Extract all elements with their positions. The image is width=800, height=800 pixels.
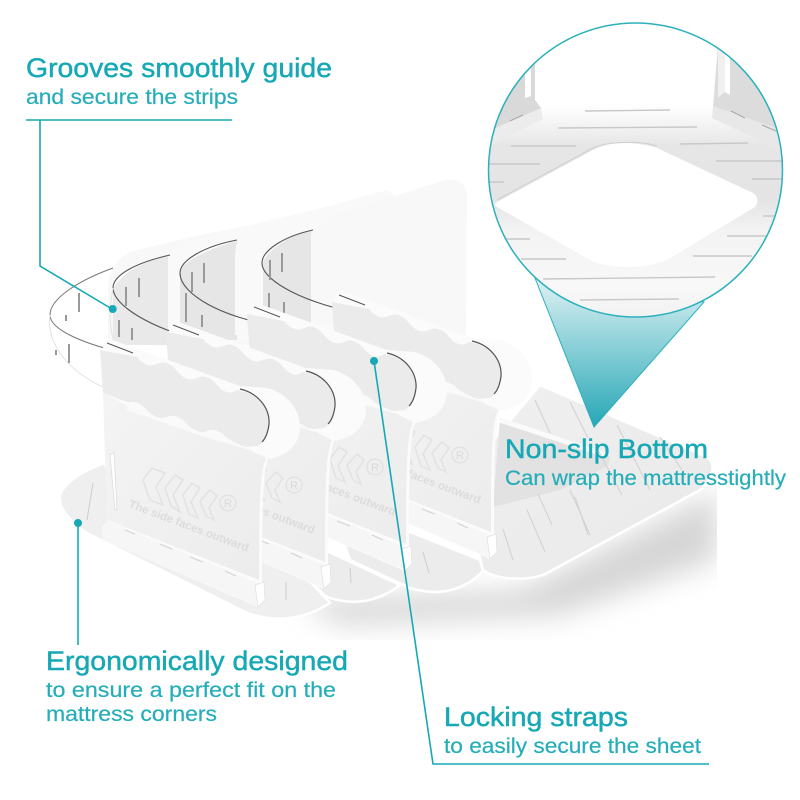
magnifier circle: non-slip bottom detail [480, 23, 790, 317]
back panel 2 [168, 212, 310, 340]
text: ergonomically designed: Ergonomically designed [46, 646, 348, 676]
drop shadow [300, 490, 717, 625]
product: mattress corner holder [50, 180, 717, 625]
text: grooves [26, 53, 332, 109]
holder 3 [247, 302, 447, 571]
leader: locking straps [371, 358, 709, 764]
back panel 3 [235, 190, 395, 335]
holder 4: R [456, 450, 464, 462]
text: grooves: Grooves smoothly guide [26, 53, 332, 83]
text: ergonomically designed: mattress corners [46, 703, 217, 726]
holder 2: The side faces outward [193, 481, 316, 537]
back panel 4 [311, 180, 467, 340]
text: ergonomically designed [46, 646, 348, 726]
text: ergonomically designed: to ensure a perfect fit on the [46, 679, 336, 702]
text: non-slip bottom: Can wrap the mattresstightly [505, 467, 787, 490]
holder 1: The side faces outward [127, 499, 250, 555]
base plate: front [60, 463, 330, 619]
holder 2: R [290, 480, 298, 492]
text: non-slip bottom [505, 434, 787, 490]
holder 2 [166, 320, 366, 589]
holder 3: R [371, 462, 379, 474]
holder 1 [100, 338, 300, 607]
plate ribs [87, 483, 429, 600]
leader: grooves [26, 120, 232, 312]
holder 1: R [224, 498, 232, 510]
transparent straps [50, 230, 360, 387]
text: locking straps: to easily secure the sheet [444, 735, 701, 758]
back panel 1 [108, 225, 250, 345]
callout pointer: gradient triangle [535, 278, 704, 427]
text: grooves: and secure the strips [26, 86, 238, 109]
leader: ergonomic [75, 520, 81, 645]
holder 4 [332, 290, 532, 559]
base plate: third lobe [330, 500, 483, 592]
text: locking straps [444, 702, 701, 758]
text: non-slip bottom: Non-slip Bottom [505, 434, 708, 464]
holder 3: The side faces outward [274, 463, 397, 519]
base plate: back [460, 385, 712, 579]
base plate: second lobe [260, 520, 400, 602]
holder 4: The side faces outward [359, 451, 482, 507]
text: locking straps: Locking straps [444, 702, 628, 732]
